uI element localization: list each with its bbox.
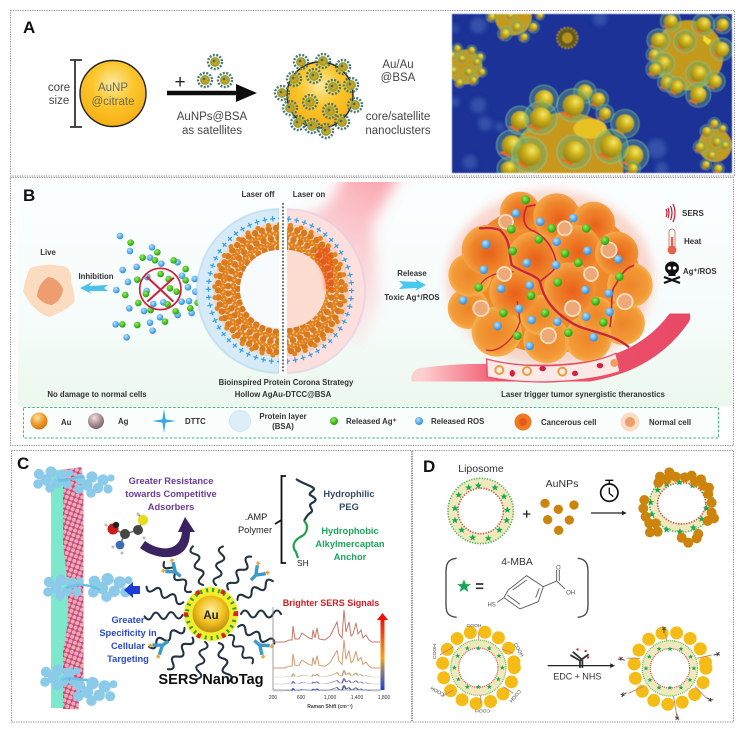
4-MBA molecule: O bbox=[556, 566, 561, 572]
cluster labels: @BSA bbox=[381, 72, 416, 84]
conjugation arrow bbox=[548, 663, 615, 668]
label: Ag ROS: Ag⁺/ROS bbox=[683, 267, 717, 276]
liposome with 4-MBA bbox=[448, 478, 513, 544]
4-MBA brackets bbox=[446, 558, 588, 617]
COOH functionalized liposome: COOH bbox=[475, 707, 490, 713]
AuNPs label: AuNPs bbox=[546, 478, 578, 490]
panel C: SERS nanotag bbox=[12, 450, 412, 722]
heading B: B bbox=[23, 186, 35, 205]
icon: SERS waves bbox=[666, 204, 675, 222]
laser state labels: Laser on bbox=[293, 190, 325, 199]
laser state labels: Laser off bbox=[242, 190, 274, 199]
Raman spectra chart: 200 bbox=[269, 695, 277, 701]
release arrow bbox=[384, 269, 440, 302]
EDC NHS label: EDC + NHS bbox=[553, 671, 601, 681]
plus sign bbox=[523, 510, 530, 518]
legend: protein layer: (BSA) bbox=[272, 422, 294, 431]
live normal cell bbox=[23, 248, 75, 317]
laser beam bbox=[304, 182, 406, 341]
legend: normal cell bbox=[620, 412, 691, 432]
released ions inhibited bbox=[112, 233, 201, 341]
legend: released ROS: Released ROS bbox=[431, 417, 484, 426]
panel A: core satellite synthesis bbox=[10, 0, 734, 225]
resistance label: Greater Resistance bbox=[129, 476, 213, 486]
Raman spectra chart: 1,800 bbox=[378, 695, 390, 701]
reaction arrow with satellites: as satellites bbox=[182, 125, 242, 137]
heading A: A bbox=[23, 18, 35, 37]
Raman spectra chart bbox=[269, 607, 390, 710]
COOH functionalized liposome: COOH bbox=[432, 644, 438, 659]
SERS nanotag particle: Au bbox=[203, 610, 219, 622]
released Ag ions in tumor bbox=[474, 196, 624, 340]
liposome label: Liposome bbox=[458, 463, 504, 475]
blood vessel bbox=[422, 317, 680, 378]
legend: Au bbox=[30, 412, 72, 430]
cluster labels: Au/Au bbox=[382, 59, 414, 71]
curved purple arrow bbox=[140, 517, 195, 557]
legend: Au: Au bbox=[61, 418, 72, 427]
release arrow: Release bbox=[397, 269, 427, 278]
core size bracket: core bbox=[48, 82, 70, 94]
reaction arrow with satellites: + bbox=[174, 72, 186, 93]
vessel window bbox=[487, 353, 620, 382]
legend: protein layer bbox=[230, 410, 307, 432]
surface receptors bbox=[33, 466, 132, 706]
icon: thermometer bbox=[668, 229, 676, 254]
legend: Ag bbox=[88, 413, 129, 429]
stopwatch bbox=[601, 480, 618, 501]
3D render of nanoclusters bbox=[446, 0, 733, 225]
polymer bracket bbox=[275, 476, 286, 563]
4-MBA star symbol bbox=[457, 579, 471, 592]
SH label: SH bbox=[297, 558, 309, 568]
icon: skull and crossbones bbox=[664, 262, 680, 283]
antibody functionalized liposome bbox=[618, 626, 721, 720]
specificity label: Greater bbox=[111, 615, 145, 625]
AMP polymer label: Polymer bbox=[238, 525, 272, 535]
blood cells bbox=[495, 359, 618, 377]
cell membrane strip bbox=[51, 470, 83, 708]
COOH functionalized liposome: COOH bbox=[430, 684, 446, 697]
anchor label: Hydrophobic bbox=[321, 526, 379, 536]
tumor capillaries bbox=[480, 205, 633, 351]
antibody icon bbox=[570, 648, 589, 668]
laser on half bbox=[287, 209, 365, 373]
COOH functionalized liposome: COOH bbox=[512, 642, 525, 658]
resistance label: Adsorbers bbox=[148, 502, 194, 512]
tumor lobes bbox=[448, 192, 653, 363]
competitive adsorber molecule bbox=[104, 512, 148, 554]
legend: Ag: Ag bbox=[118, 417, 129, 426]
liposome decorated with AuNPs bbox=[638, 467, 719, 548]
legend: DTTC: DTTC bbox=[185, 417, 206, 426]
normal cells in tumor bbox=[473, 215, 633, 343]
cluster labels: core/satellite bbox=[366, 111, 430, 123]
reaction arrow bbox=[591, 511, 627, 515]
COOH functionalized liposome: COOH bbox=[467, 623, 482, 629]
chart title: Brighter SERS Signals bbox=[283, 598, 379, 608]
gold silver nanoparticle ring bbox=[208, 218, 352, 362]
COOH functionalized liposome bbox=[430, 623, 525, 713]
blue targeting arrow bbox=[124, 582, 140, 598]
4-MBA label: 4-MBA bbox=[501, 557, 533, 568]
specificity label: Cellular bbox=[111, 641, 145, 651]
panel D: liposome assembly bbox=[412, 450, 734, 722]
core satellite nanocluster bbox=[275, 54, 362, 138]
AuNP citrate sphere: AuNP bbox=[98, 82, 128, 94]
PEG label: Hydrophilic bbox=[323, 489, 375, 499]
Raman spectra chart: Raman Shift (cm⁻¹) bbox=[307, 704, 353, 710]
4-MBA molecule: HS bbox=[487, 603, 496, 609]
4-MBA molecule bbox=[487, 566, 575, 609]
core size bracket: size bbox=[49, 95, 69, 107]
AMP polymer label: .AMP bbox=[245, 512, 267, 522]
4-MBA molecule: OH bbox=[566, 590, 575, 596]
tumor with vessels bbox=[422, 190, 680, 382]
hollow AgAu nanoshell sphere bbox=[197, 203, 365, 375]
legend: cancerous cell: Cancerous cell bbox=[541, 418, 596, 427]
released ROS in tumor bbox=[459, 209, 623, 350]
anchor label: Alkylmercaptan bbox=[315, 539, 385, 549]
inhibition arrow bbox=[78, 272, 114, 294]
legend: DTTC bbox=[152, 409, 206, 433]
equals sign bbox=[476, 584, 483, 588]
Raman spectra chart: 1,400 bbox=[351, 695, 363, 701]
legend box bbox=[24, 408, 718, 438]
COOH functionalized liposome: COOH bbox=[507, 688, 522, 704]
AuNP citrate sphere bbox=[80, 60, 146, 126]
core size bracket bbox=[48, 60, 82, 127]
heading C: C bbox=[17, 454, 29, 473]
reaction arrow with satellites bbox=[167, 55, 257, 137]
heading D: D bbox=[423, 457, 435, 476]
caption: protein corona: Hollow AgAu-DTCC@BSA bbox=[235, 390, 332, 399]
caption: no damage: No damage to normal cells bbox=[47, 390, 147, 399]
live normal cell: Live bbox=[40, 248, 56, 257]
legend: cancerous cell bbox=[514, 414, 596, 430]
PEG and anchor chain bbox=[294, 479, 316, 558]
laser off half bbox=[197, 209, 279, 373]
Raman spectra chart: 600 bbox=[297, 695, 305, 701]
reaction arrow with satellites: AuNPs@BSA bbox=[177, 111, 247, 123]
nanotag title: SERS NanoTag bbox=[158, 672, 264, 688]
SERS nanotag particle bbox=[144, 545, 281, 683]
tumor caption: Laser trigger tumor synergistic theranostics bbox=[501, 390, 666, 399]
specificity label: Specificity in bbox=[99, 628, 157, 638]
D artwork in zoom coordinates bbox=[430, 467, 721, 720]
anchor label: Anchor bbox=[334, 552, 367, 562]
resistance label: towards Competitive bbox=[125, 489, 217, 499]
PEG label: PEG bbox=[339, 502, 359, 512]
legend: normal cell: Normal cell bbox=[649, 418, 691, 427]
AuNP citrate sphere: @citrate bbox=[92, 96, 134, 108]
release arrow: Toxic Ag⁺/ROS bbox=[384, 293, 440, 302]
caption: protein corona: Bioinspired Protein Corona Strategy bbox=[219, 378, 353, 387]
legend: released Ag: Released Ag⁺ bbox=[346, 417, 397, 426]
label: heat: Heat bbox=[684, 237, 702, 246]
label: SERS: SERS bbox=[682, 209, 704, 218]
cluster labels: nanoclusters bbox=[365, 125, 431, 137]
specificity label: Targeting bbox=[107, 654, 149, 664]
panel B: laser triggered theranostics bbox=[10, 165, 734, 446]
laser divider bbox=[279, 203, 287, 375]
microtubule bbox=[64, 469, 83, 709]
legend: protein layer: Protein layer bbox=[259, 412, 307, 421]
gold nanoparticles bbox=[540, 499, 579, 535]
inhibition arrow: Inhibition bbox=[78, 272, 114, 281]
Raman spectra chart: 1,000 bbox=[324, 695, 336, 701]
